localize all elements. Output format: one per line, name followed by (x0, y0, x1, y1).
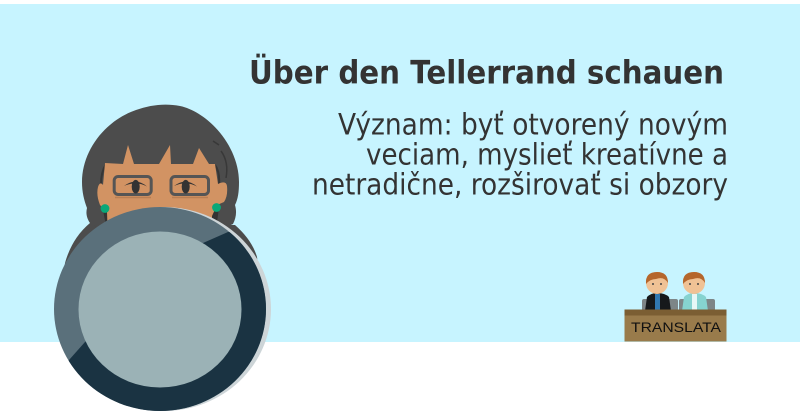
text block: meaning (312, 108, 728, 202)
text block: meaning: netradične, rozširovať si obzory (312, 168, 728, 202)
face (97, 145, 227, 240)
left translator (645, 272, 671, 311)
earrings (101, 204, 109, 213)
text block: meaning: veciam, myslieť kreatívne a (366, 138, 728, 172)
desk (624, 310, 726, 342)
glasses (114, 176, 208, 194)
lens shadow (57, 207, 271, 411)
chairs (642, 299, 678, 311)
rim dark arc (68, 232, 266, 411)
hair (82, 105, 239, 232)
magnifying glass (54, 207, 271, 411)
desk label: TRANSLATA (631, 319, 722, 335)
text block: meaning: Význam: byť otvorený novým (338, 108, 728, 142)
hair beside face (101, 164, 219, 184)
character: woman behind magnifier (62, 105, 262, 300)
glasses shadow (115, 196, 208, 198)
title: Über den Tellerrand schauen (249, 54, 724, 92)
lens rim (54, 207, 266, 411)
logo: Translata (624, 272, 726, 342)
lens glass (78, 232, 242, 388)
body (62, 223, 262, 300)
right translator (682, 272, 708, 311)
hair strand shading (213, 141, 227, 178)
eyes (124, 180, 197, 194)
hair behind ears (103, 208, 219, 226)
